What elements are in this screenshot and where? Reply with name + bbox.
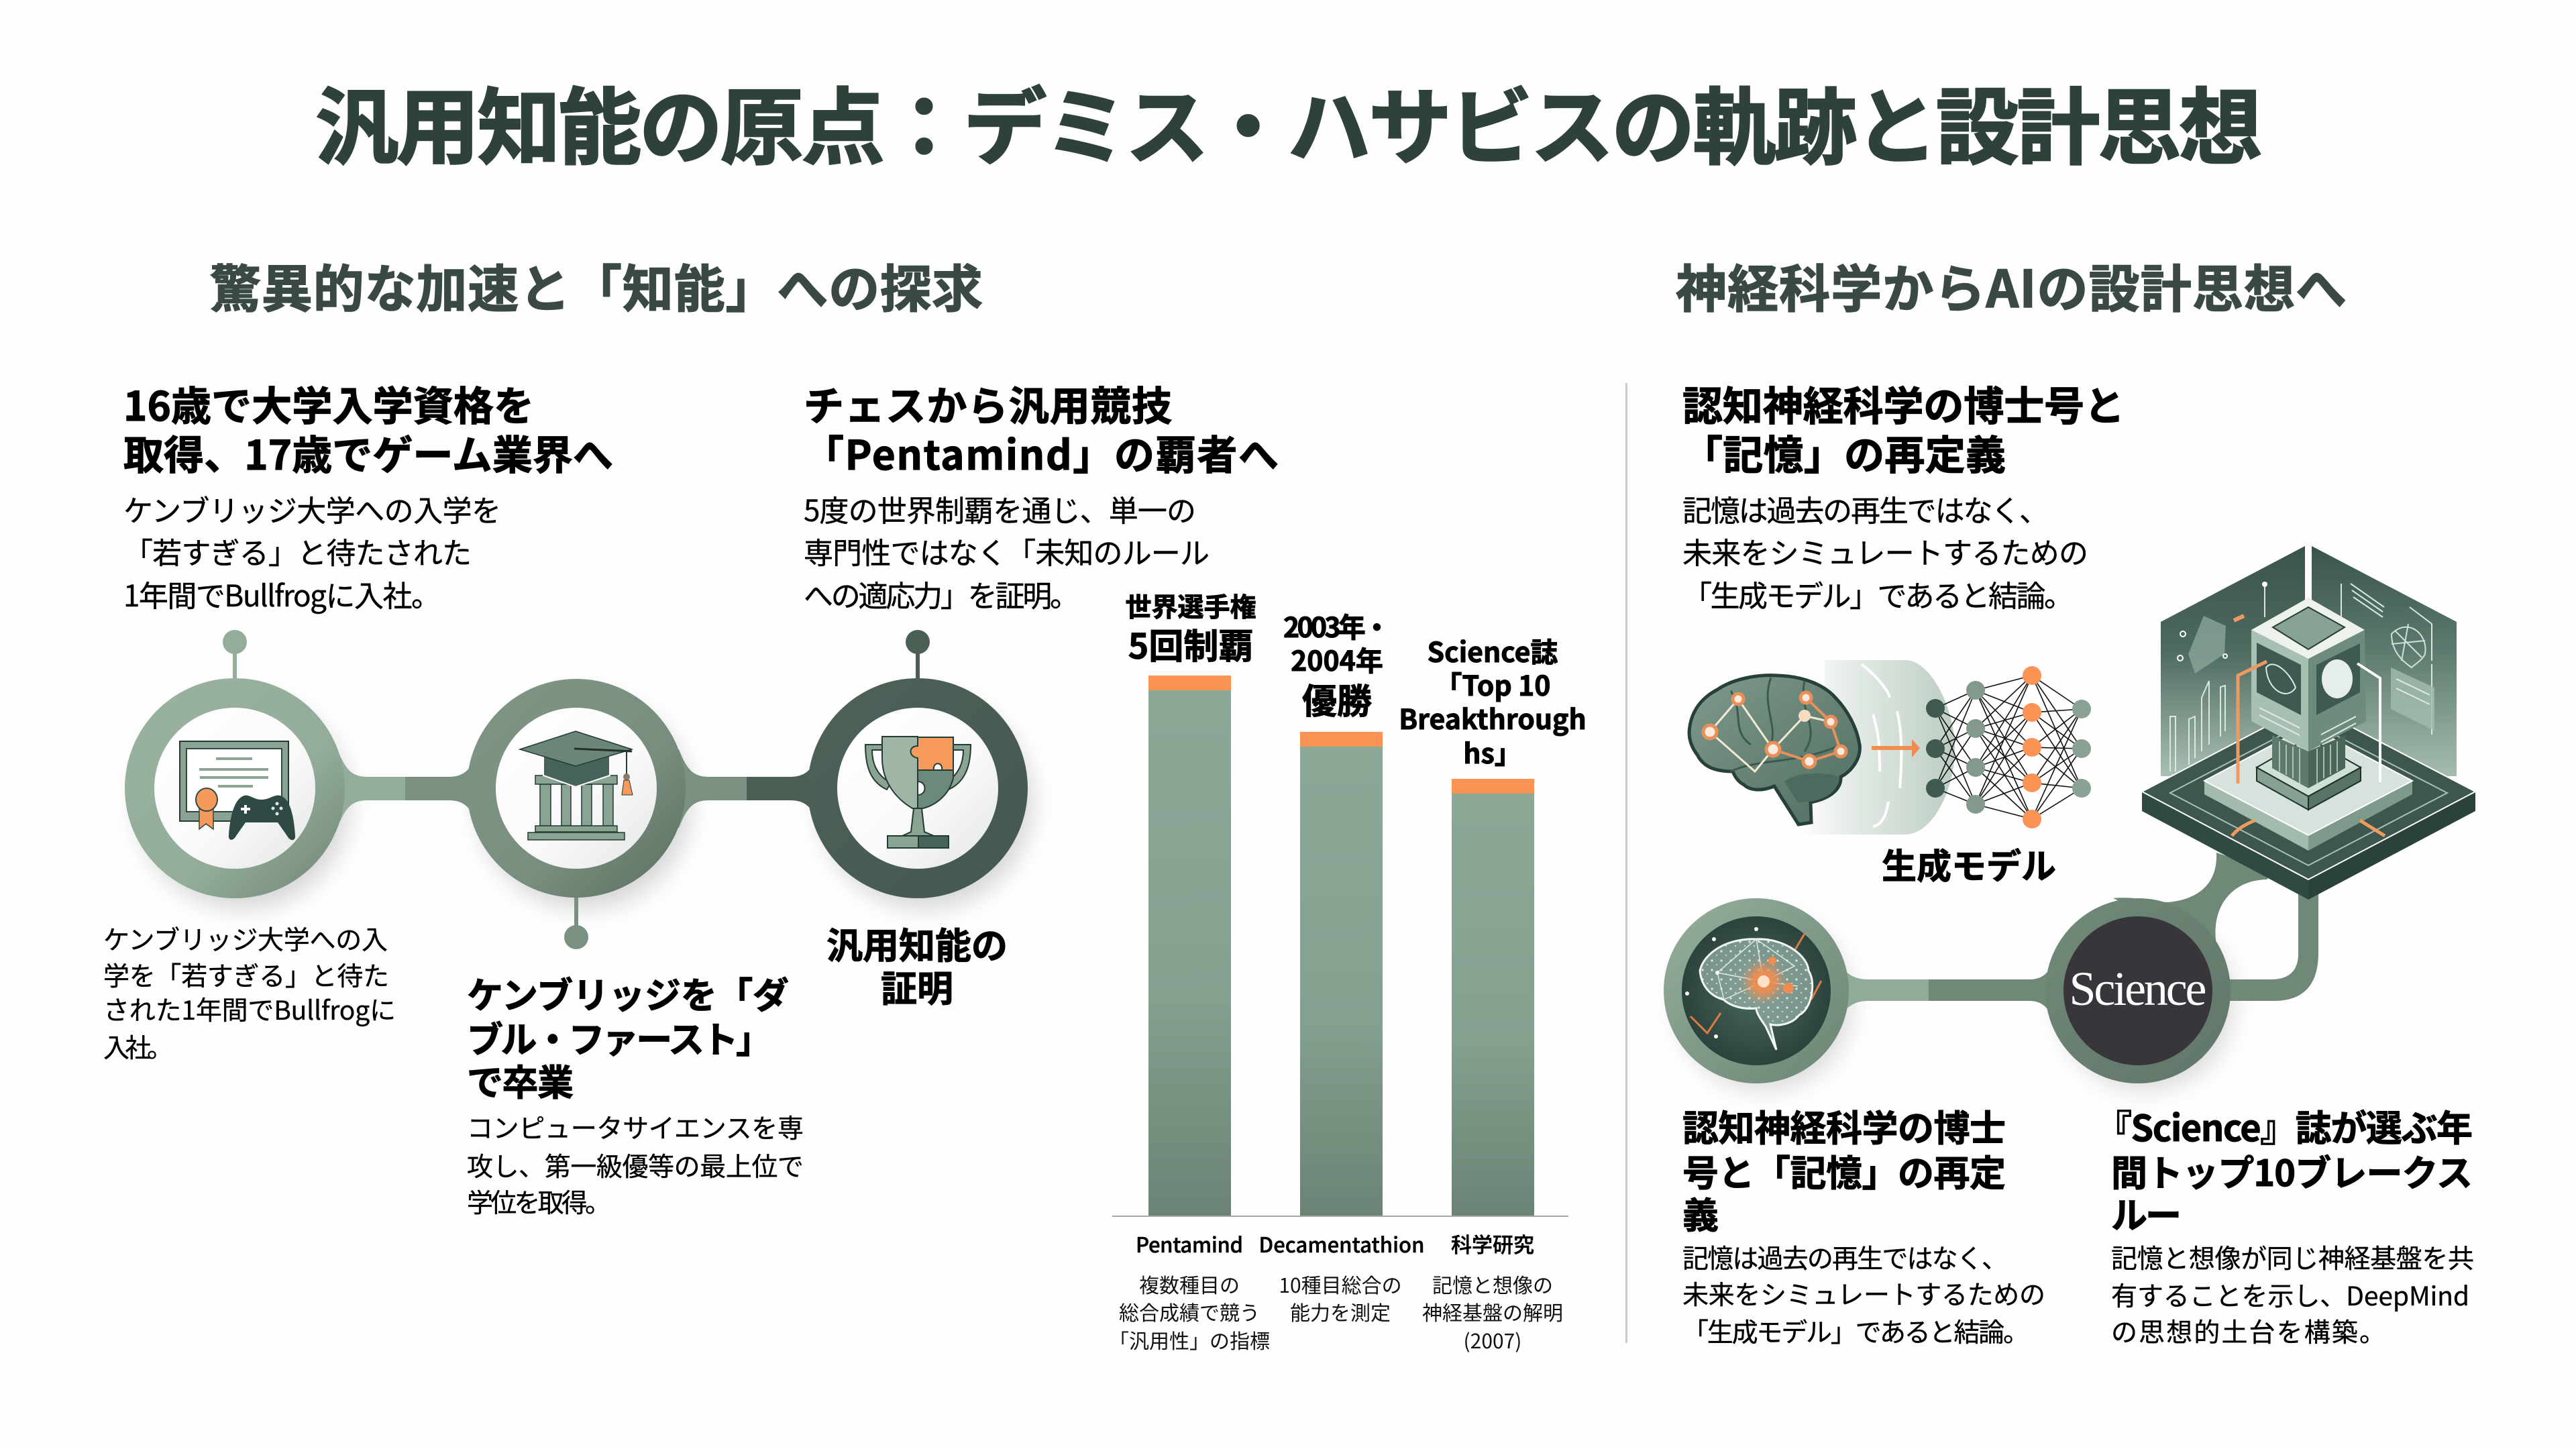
text block: dissertation: 「生成モデル」であると結論。 <box>1682 1312 2029 1350</box>
icon: diploma <box>180 741 288 829</box>
column base <box>2257 738 2361 810</box>
text block: Science top 10: の思想的土台を構築。 <box>2111 1312 2385 1350</box>
icon: brain <box>1689 676 1860 824</box>
panel: cap sketch <box>2178 616 2244 674</box>
label: proof of general intelligence <box>826 916 1008 1012</box>
label: proof of general intelligence: 汎用知能の <box>826 916 1008 969</box>
node shadows <box>137 696 1032 908</box>
text block: double first <box>467 966 804 1220</box>
value label: Decamentathion: 優勝 <box>1302 674 1372 724</box>
connector: node 1 to 2 <box>322 749 496 828</box>
text block: Science top 10: ルー <box>2111 1186 2182 1239</box>
white connector <box>2357 663 2380 782</box>
node 2: graduation cap and pillars <box>467 679 686 898</box>
note: science research <box>1422 1269 1563 1354</box>
text block: Cambridge early: 学を「若すぎる」と待た <box>103 956 389 994</box>
connector: brain node to Science node <box>1811 939 2076 1043</box>
note: science research: (2007) <box>1464 1325 1521 1354</box>
text block: Cambridge early: ケンブリッジ大学への入 <box>103 920 388 957</box>
divider <box>1625 383 1627 1343</box>
value label: Pentamind: 世界選手権 <box>1125 587 1256 625</box>
label: proof of general intelligence: 証明 <box>881 959 953 1012</box>
timeline: three connected nodes <box>125 630 1032 949</box>
slab <box>2204 726 2412 851</box>
node: glowing brain <box>1664 898 1849 1083</box>
panel: pin <box>2262 582 2267 587</box>
node shadows <box>1677 916 2233 1090</box>
pin: node 1 <box>223 630 247 681</box>
text block: Pentamind <box>804 374 1279 615</box>
illustration: brain to neural network <box>1689 660 2091 835</box>
value label: Science: 「Top 10 <box>1435 663 1550 704</box>
text block: Cambridge early <box>103 920 396 1065</box>
value label: Decamentathion: 2003年・ <box>1283 605 1391 645</box>
text block: cognitive neuroscience: 記憶は過去の再生ではなく、 <box>1682 487 2049 530</box>
text block: age 16: 16歳で大学入学資格を <box>123 374 534 433</box>
text block: Pentamind: チェスから汎用競技 <box>804 374 1172 433</box>
node: Science logo: Science <box>2069 962 2207 1016</box>
orange connector <box>2238 661 2267 784</box>
axis label: science research: 科学研究 <box>1451 1228 1534 1258</box>
flow band <box>1798 660 1955 835</box>
note: Decamentathion: 10種目総合の <box>1279 1269 1402 1299</box>
title: 汎用知能の原点：デミス・ハサビスの軌跡と設計思想 <box>315 60 2262 181</box>
icon: game controller <box>229 796 295 840</box>
bar chart: achievements <box>1109 587 1587 1354</box>
node: Science logo <box>2045 898 2231 1083</box>
text block: cognitive neuroscience: 「記憶」の再定義 <box>1682 423 2006 482</box>
text block: Cambridge early: された1年間でBullfrogに <box>103 990 396 1028</box>
text block: Science top 10: 記憶と想像が同じ神経基盤を共 <box>2111 1238 2474 1276</box>
note: Pentamind: 「汎用性」の指標 <box>1109 1325 1270 1354</box>
value label: Science: hs」 <box>1463 731 1522 771</box>
arrow <box>1872 739 1920 757</box>
text block: dissertation: 記憶は過去の再生ではなく、 <box>1682 1238 2008 1276</box>
connector: node 2 to 3 <box>663 749 838 828</box>
back panel: right <box>2312 546 2457 776</box>
icon: pillars <box>528 775 625 840</box>
note: Decamentathion <box>1279 1269 1402 1326</box>
pin: node 3 <box>906 630 930 681</box>
text block: Pentamind: 「Pentamind」の覇者へ <box>804 423 1279 482</box>
node 3: puzzle trophy <box>808 678 1028 898</box>
text block: age 16: 取得、17歳でゲーム業界へ <box>123 423 613 482</box>
node 1: diploma and controller <box>125 678 345 898</box>
pin: node 2 <box>564 896 588 949</box>
value label: Pentamind: 5回制覇 <box>1128 619 1253 669</box>
note: science research: 記憶と想像の <box>1432 1269 1553 1299</box>
note: Pentamind <box>1109 1269 1270 1354</box>
text block: double first: コンピュータサイエンスを専 <box>467 1108 804 1146</box>
value label: Decamentathion <box>1283 605 1391 724</box>
neural network <box>1926 666 2091 828</box>
text block: age 16: ケンブリッジ大学への入学を <box>123 487 501 530</box>
bar: science <box>1452 779 1534 1216</box>
text block: age 16: 1年間でBullfrogに入社。 <box>123 572 441 615</box>
value label: Science: Science誌 <box>1428 630 1558 670</box>
text block: cognitive neuroscience: 「生成モデル」であると結論。 <box>1682 572 2074 615</box>
text block: cognitive neuroscience: 認知神経科学の博士号と <box>1682 374 2125 433</box>
note: science research: 神経基盤の解明 <box>1422 1297 1563 1326</box>
text block: double first: 学位を取得。 <box>467 1183 611 1220</box>
label: generative model: 生成モデル <box>1882 839 2056 889</box>
text block: Science top 10: 間トップ10ブレークス <box>2111 1144 2473 1197</box>
text block: Pentamind: 5度の世界制覇を通じ、単一の <box>804 487 1196 530</box>
bar: Decamentathion <box>1300 732 1383 1216</box>
axis label: Pentamind: Pentamind <box>1136 1228 1243 1258</box>
text block: cognitive neuroscience <box>1682 374 2125 615</box>
panel details <box>2170 584 2432 771</box>
text block: Pentamind: への適応力」を証明。 <box>804 572 1079 615</box>
bar: Pentamind <box>1148 676 1231 1216</box>
note: Pentamind: 複数種目の <box>1139 1269 1240 1299</box>
text block: Science top 10 <box>2096 1099 2474 1350</box>
section heading: right: 神経科学からAIの設計思想へ <box>1676 248 2347 322</box>
flow strokes <box>1862 664 1901 826</box>
axis <box>1112 1216 1568 1217</box>
section heading: left: 驚異的な加速と「知能」への探求 <box>210 248 983 322</box>
value label: Science: Breakthrough <box>1399 697 1587 737</box>
text block: age 16: 「若すぎる」と待たされた <box>123 529 472 572</box>
text block: dissertation: 義 <box>1682 1186 1719 1239</box>
note: Pentamind: 総合成績で競う <box>1119 1297 1260 1326</box>
text block: dissertation: 号と「記憶」の再定 <box>1682 1144 2006 1197</box>
text block: dissertation <box>1682 1099 2045 1350</box>
text block: Cambridge early: 入社。 <box>103 1028 173 1065</box>
cube <box>2251 598 2366 751</box>
panel: document <box>2391 667 2434 731</box>
text block: dissertation: 未来をシミュレートするための <box>1682 1275 2045 1312</box>
text block: double first: ブル・ファースト」 <box>467 1010 772 1063</box>
text block: double first: ケンブリッジを「ダ <box>467 966 789 1019</box>
text block: Science top 10: 有することを示し、DeepMind <box>2111 1276 2469 1313</box>
text block: Pentamind: 専門性ではなく「未知のルール <box>804 529 1210 572</box>
pillar <box>2272 735 2345 788</box>
connector: Science node to platform <box>2113 853 2318 1001</box>
icon: trophy <box>865 737 971 848</box>
icon: glowing brain <box>1685 927 1821 1050</box>
value label: Decamentathion: 2004年 <box>1291 639 1383 679</box>
text block: age 16 <box>123 374 613 615</box>
text block: cognitive neuroscience: 未来をシミュレートするための <box>1682 529 2088 572</box>
text block: double first: 攻し、第一級優等の最上位で <box>467 1146 804 1184</box>
text block: double first: で卒業 <box>467 1053 574 1106</box>
note: Decamentathion: 能力を測定 <box>1290 1297 1391 1326</box>
orange traces on platform <box>2232 820 2385 836</box>
axis label: Decamentathion: Decamentathion <box>1258 1228 1425 1258</box>
back panel: left <box>2161 546 2305 776</box>
text block: Science top 10: 『Science』誌が選ぶ年 <box>2096 1099 2473 1152</box>
right timeline: connected nodes <box>1664 853 2318 1090</box>
value label: Science <box>1399 630 1587 771</box>
value label: Pentamind <box>1125 587 1256 669</box>
platform <box>2142 704 2475 900</box>
illustration: isometric architecture <box>2142 546 2475 900</box>
icon: mortarboard <box>520 731 633 795</box>
panel: net sketch <box>2392 624 2426 667</box>
text block: dissertation: 認知神経科学の博士 <box>1682 1099 2006 1152</box>
